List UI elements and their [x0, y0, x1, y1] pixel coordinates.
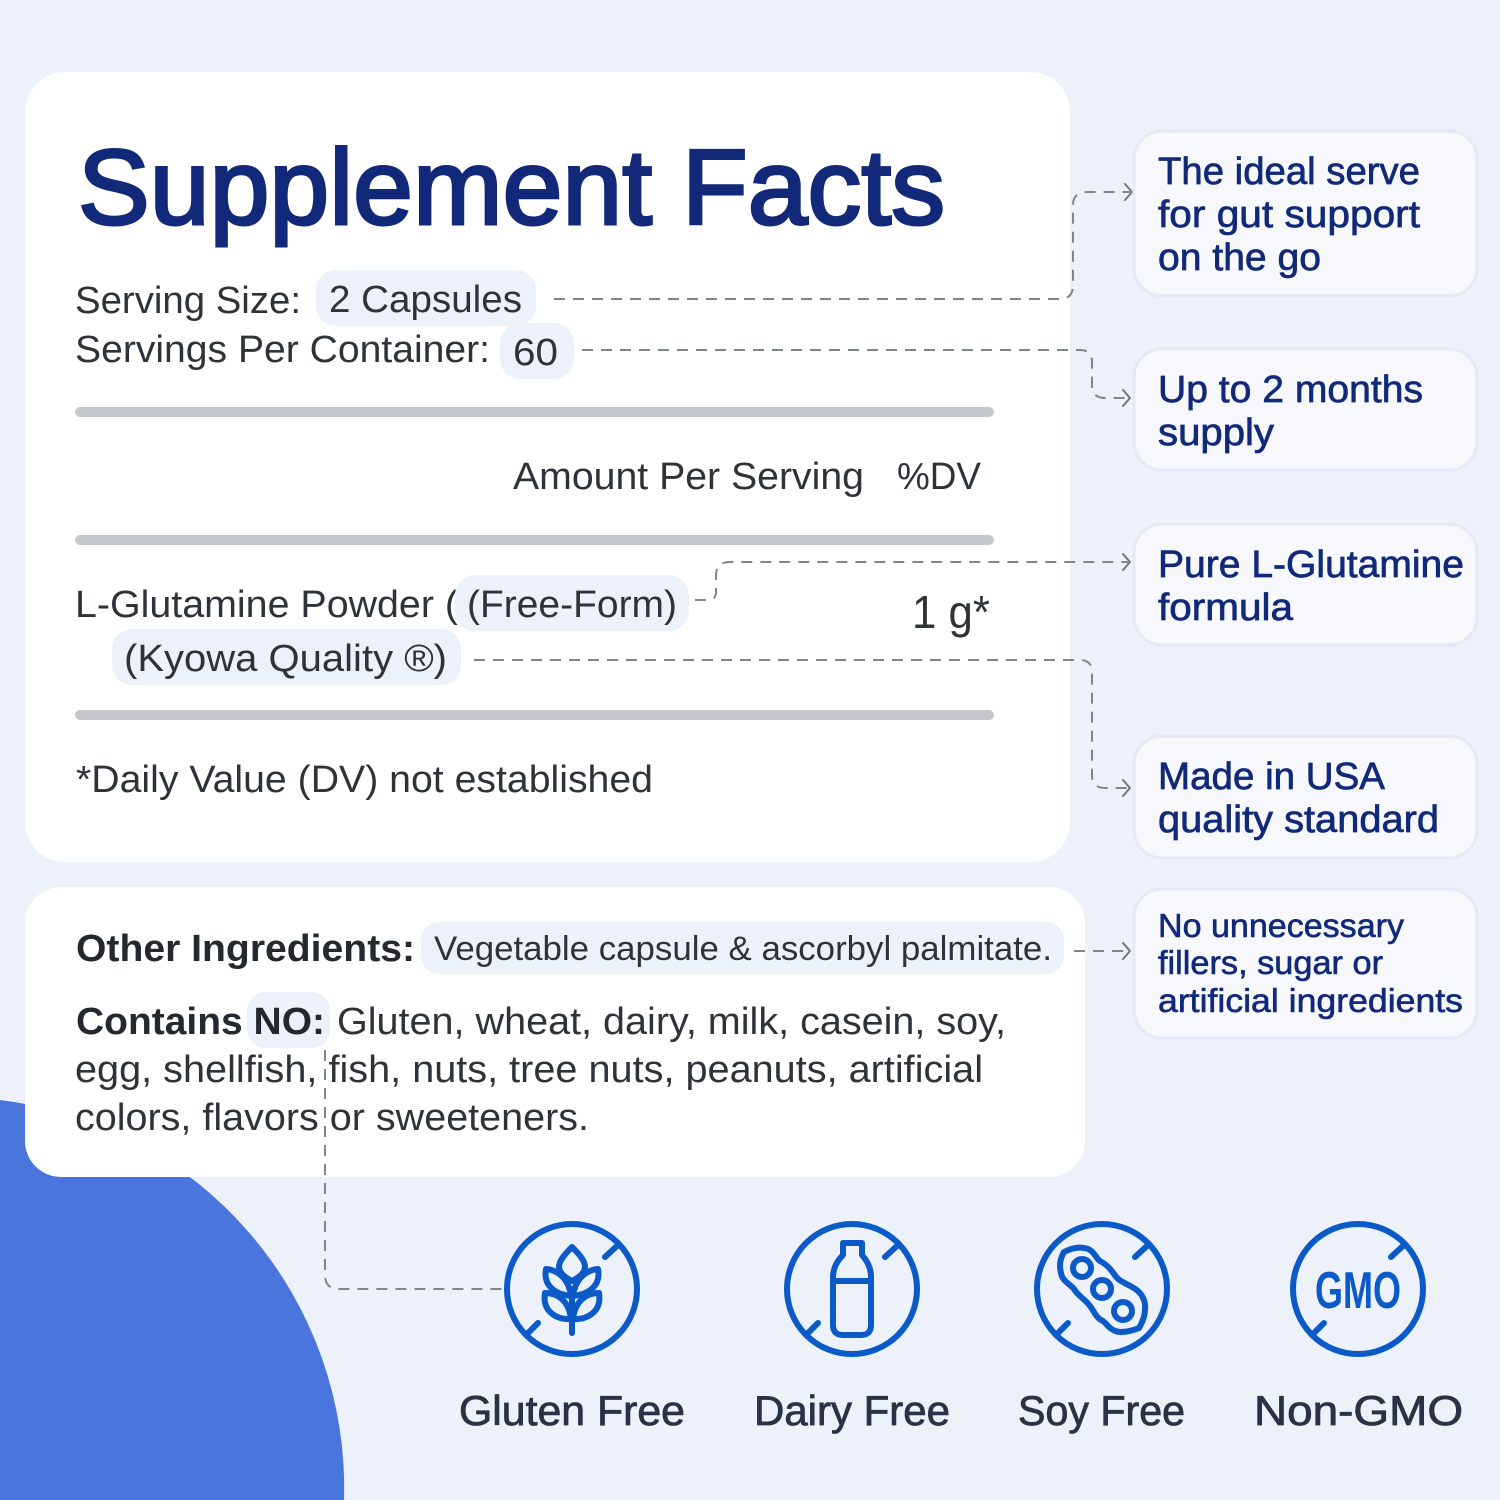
callout: ideal serve	[1134, 131, 1477, 296]
callout: two months supply	[1134, 349, 1477, 470]
callout: made in usa	[1134, 736, 1477, 858]
callout: no fillers: No unnecessary	[1158, 907, 1405, 944]
callout: two months supply: Up to 2 months	[1158, 369, 1423, 411]
other ingredients line	[76, 922, 1064, 974]
callout: pure l-glutamine: formula	[1158, 587, 1294, 629]
other ingredients line: Vegetable capsule & ascorbyl palmitate.	[434, 930, 1052, 968]
servings per container: Servings Per Container:	[75, 329, 490, 371]
panel: other ingredients	[25, 887, 1085, 1177]
icon: non-gmo: GMO	[1315, 1262, 1401, 1320]
icon: non-gmo	[1293, 1224, 1423, 1354]
callout: no fillers: artificial ingredients	[1158, 982, 1463, 1019]
callout: no fillers	[1134, 889, 1477, 1038]
footnote: *Daily Value (DV) not established	[76, 759, 653, 801]
decorative blue circle	[0, 1100, 344, 1500]
icon: soy free	[1037, 1224, 1167, 1354]
ingredient row: (Free-Form)	[467, 584, 677, 626]
arrow: servings per container to callout	[582, 350, 1130, 406]
table header: %DV	[897, 456, 982, 498]
arrow: serving size to callout	[554, 184, 1132, 299]
callout: made in usa: quality standard	[1158, 799, 1439, 841]
serving size	[75, 270, 536, 326]
serving size: Serving Size:	[75, 280, 301, 322]
ingredient row: L-Glutamine Powder (	[75, 584, 458, 626]
title: Supplement Facts	[78, 127, 945, 247]
arrow: other ingredients to callout	[1074, 943, 1130, 959]
callout: made in usa: Made in USA	[1158, 756, 1386, 798]
table header: Amount Per Serving	[513, 456, 864, 498]
label: soy free: Soy Free	[1018, 1387, 1185, 1434]
callout: ideal serve: on the go	[1158, 237, 1321, 279]
label: gluten free: Gluten Free	[459, 1387, 685, 1434]
contains no text: Gluten, wheat, dairy, milk, casein, soy,	[337, 1001, 1006, 1043]
contains no text	[75, 992, 1006, 1139]
connector: contains no to gluten free icon	[325, 1050, 504, 1289]
servings per container: 60	[513, 332, 558, 374]
ingredient row: (Kyowa Quality ®)	[124, 638, 447, 680]
contains no text: colors, flavors or sweeteners.	[75, 1097, 589, 1139]
arrow: free-form to callout	[695, 554, 1130, 600]
callout: two months supply: supply	[1158, 412, 1274, 454]
contains no text: egg, shellfish, fish, nuts, tree nuts, peanuts, artificial	[75, 1049, 983, 1091]
contains no text: Contains NO:	[76, 1001, 325, 1043]
arrow: kyowa quality to callout	[474, 660, 1130, 796]
other ingredients line: Other Ingredients:	[76, 928, 415, 970]
icon: gluten free	[507, 1224, 637, 1354]
serving size: 2 Capsules	[329, 279, 522, 321]
callout: pure l-glutamine: Pure L-Glutamine	[1158, 544, 1464, 586]
callout: no fillers: fillers, sugar or	[1158, 944, 1383, 981]
callout: ideal serve: for gut support	[1158, 194, 1420, 236]
label: dairy free: Dairy Free	[754, 1387, 950, 1434]
callout: ideal serve: The ideal serve	[1158, 151, 1420, 193]
servings per container	[75, 323, 574, 379]
callout: pure l-glutamine	[1134, 524, 1477, 645]
icon: dairy free	[787, 1224, 917, 1354]
ingredient row: 1 g*	[912, 586, 990, 638]
label: non-gmo: Non-GMO	[1254, 1387, 1463, 1434]
ingredient row	[75, 575, 990, 685]
panel: supplement facts	[25, 72, 1070, 862]
